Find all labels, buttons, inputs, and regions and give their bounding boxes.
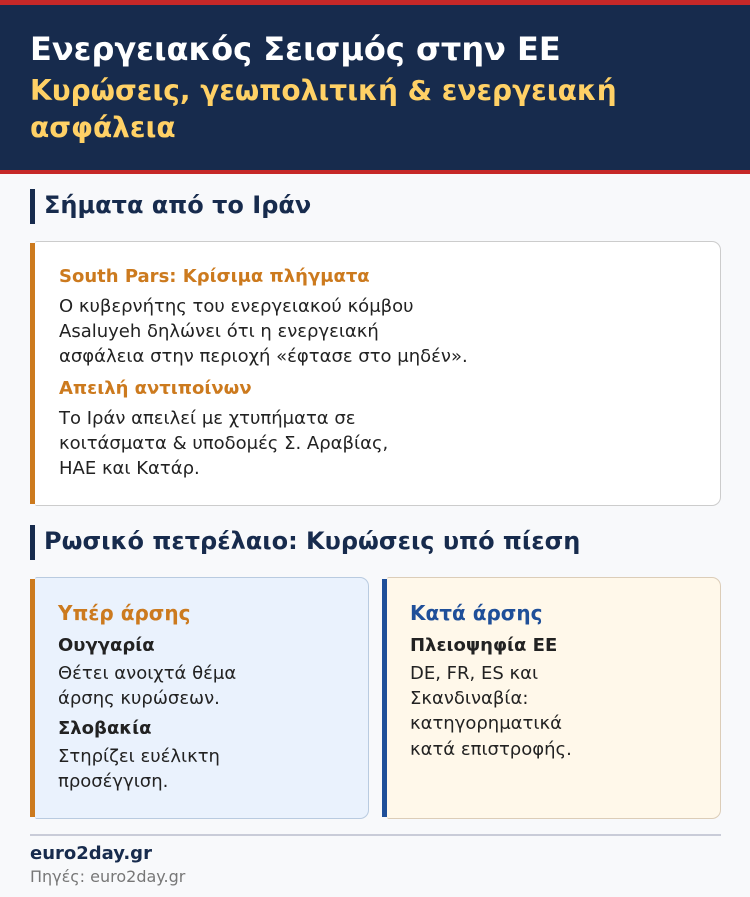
column heading: Κατά άρσης — [410, 601, 542, 625]
text: retaliation threat — [58, 408, 388, 479]
text: Hungary: Θέτει ανοιχτά θέμα — [58, 663, 236, 684]
country: Slovakia: Σλοβακία — [58, 718, 151, 739]
text: South Pars — [59, 296, 468, 367]
subtitle: Κυρώσεις, γεωπολιτική & ενεργειακή — [30, 74, 617, 107]
subtitle — [30, 74, 617, 144]
text: EU majority: κατά επιστροφής. — [410, 739, 572, 760]
heading: Russian oil — [30, 525, 720, 560]
text: Slovakia: προσέγγιση. — [58, 771, 168, 792]
text: EU majority: Σκανδιναβία: — [410, 688, 528, 709]
heading: signals from Iran: Σήματα από το Ιράν — [44, 191, 311, 219]
subheading: South Pars: South Pars: Κρίσιμα πλήγματα — [59, 266, 370, 287]
text: South Pars: ασφάλεια στην περιοχή «έφτασε στο μηδέν». — [59, 346, 468, 367]
subtitle: ασφάλεια — [30, 111, 176, 144]
text: retaliation threat: ΗΑΕ και Κατάρ. — [59, 458, 200, 479]
text: Hungary: άρσης κυρώσεων. — [58, 688, 220, 709]
panel: Iran signals — [30, 241, 721, 506]
panel accent bar — [382, 579, 387, 817]
panel background — [35, 577, 369, 819]
panel accent bar — [30, 579, 35, 817]
text: EU majority — [410, 663, 572, 760]
subheading: retaliation threat: Απειλή αντιποίνων — [59, 378, 252, 399]
text: Slovakia: Στηρίζει ευέλικτη — [58, 746, 220, 767]
text: South Pars: Ο κυβερνήτης του ενεργειακού κόμβου — [59, 296, 414, 317]
text: EU majority: κατηγορηματικά — [410, 713, 562, 734]
heading: signals from Iran — [30, 189, 720, 224]
panel background — [35, 241, 721, 506]
panel: for lifting sanctions — [30, 577, 369, 819]
header banner — [0, 0, 750, 174]
group: EU majority: Πλειοψηφία ΕΕ — [410, 635, 557, 656]
title: Ενεργειακός Σεισμός στην ΕΕ — [30, 30, 561, 68]
footer divider — [30, 834, 721, 836]
country: Hungary: Ουγγαρία — [58, 635, 155, 656]
column heading: Υπέρ άρσης — [58, 601, 190, 625]
text: Hungary — [58, 663, 236, 709]
panel: against lifting sanctions — [382, 577, 721, 819]
text: South Pars: Asaluyeh δηλώνει ότι η ενεργειακή — [59, 321, 379, 342]
text: retaliation threat: Το Ιράν απειλεί με χτυπήματα σε — [59, 408, 356, 429]
text: Slovakia — [58, 746, 220, 792]
panel background — [387, 577, 721, 819]
text: EU majority: DE, FR, ES και — [410, 663, 538, 684]
heading: Russian oil: Ρωσικό πετρέλαιο: Κυρώσεις υπό πίεση — [44, 527, 580, 555]
text: retaliation threat: κοιτάσματα & υποδομές Σ. Αραβίας, — [59, 433, 388, 454]
footer source: Πηγές: euro2day.gr — [30, 867, 185, 886]
footer brand: euro2day.gr — [30, 843, 152, 864]
panel accent bar — [30, 243, 35, 504]
